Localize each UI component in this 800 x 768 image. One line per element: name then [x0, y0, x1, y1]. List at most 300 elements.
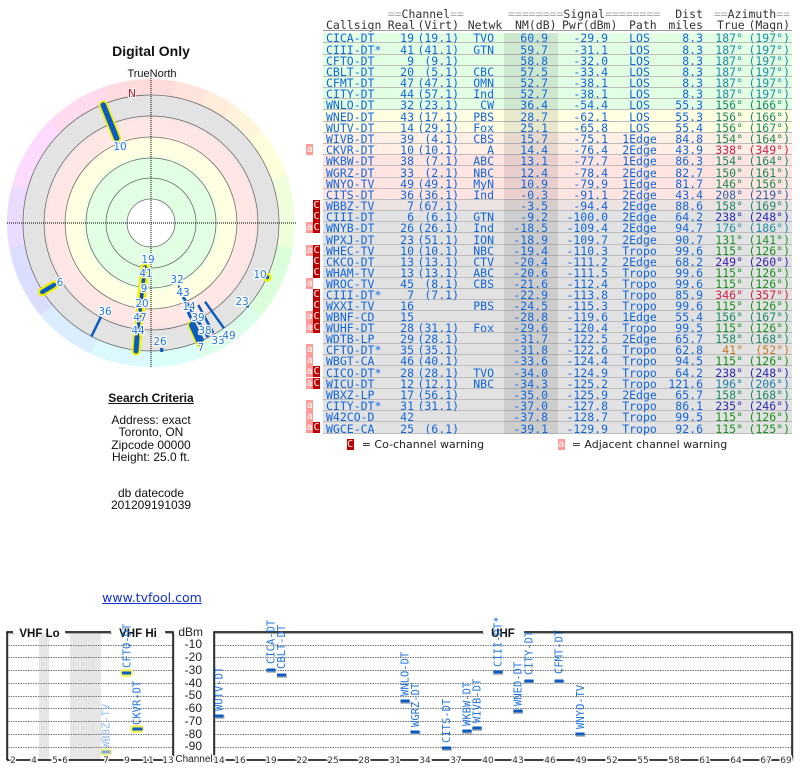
row: WGRZ-DT: NBC [473, 166, 494, 180]
dBm axis: -70 [185, 714, 202, 728]
row: WBNF-CD: (167°) [748, 310, 790, 324]
row: WNLO-DT: (23.1) [417, 98, 459, 112]
row: WUHF-DT: 99.5 [675, 321, 703, 335]
row: WHEC-TV: 99.6 [675, 244, 703, 258]
row: CIII-DT: 6 [407, 210, 414, 224]
row: WNLO-DT: CW [480, 98, 494, 112]
station labels: WBBZ-TV [100, 703, 112, 748]
channel ticks: 55 [637, 756, 649, 766]
table header: NM(dB) [515, 18, 557, 32]
polar plot background: azimuth hue ring [7, 79, 295, 367]
row: CKCO-DT: (260°) [748, 255, 790, 269]
panel: station table: a [306, 144, 313, 155]
row: CFTO-DT*: CFTO-DT* [326, 343, 381, 357]
station channel labels: 39 [191, 312, 205, 324]
row: CIII-DT*: 85.9 [675, 288, 703, 302]
row: CICO-DT*: TVO [473, 366, 494, 380]
north marker: N [128, 87, 136, 100]
row: WNYO-TV: -79.9 [573, 177, 608, 191]
table header: Real [388, 18, 415, 32]
row: CKCO-DT: 249° [715, 255, 743, 269]
channel ticks: 64 [730, 756, 742, 766]
row: WROC-TV [323, 278, 792, 289]
row: CFTO-DT: (9.1) [424, 54, 459, 68]
row: WBBZ-TV [323, 200, 792, 211]
heading: Search Criteria: Search Criteria [108, 391, 194, 405]
row: WICU-DT: 12 [400, 377, 414, 391]
panel: station table: a [306, 278, 313, 289]
row: WHEC-TV: Tropo [622, 244, 657, 258]
row: WNYB-DT: -109.4 [566, 221, 608, 235]
row: CBLT-DT: CBC [473, 65, 494, 79]
row: CICO-DT*: 28 [400, 366, 414, 380]
row: WXXI-TV: Tropo [622, 299, 657, 313]
row: WBGT-CA: 115° [715, 354, 743, 368]
row: WPXJ-DT: 90.7 [675, 233, 703, 247]
table header: ========Signal======== [508, 7, 660, 21]
row: WNED-DT: (166°) [748, 110, 790, 124]
channel ticks: 61 [699, 756, 711, 766]
row: WHAM-TV: (126°) [748, 266, 790, 280]
row: WHAM-TV: -20.6 [513, 266, 548, 280]
row: CKCO-DT: -20.4 [513, 255, 548, 269]
channel ticks: 69 [780, 756, 792, 766]
row: CIII-DT: 64.2 [675, 210, 703, 224]
row: WBXZ-LP: 17 [400, 388, 414, 402]
row: WXXI-TV: -24.5 [513, 299, 548, 313]
row: CIII-DT: (248°) [748, 210, 790, 224]
row: WPXJ-DT: -109.7 [566, 233, 608, 247]
row: WNED-DT: (17.1) [417, 110, 459, 124]
channel ticks: 9 [124, 756, 130, 766]
row: W42CO-D: Tropo [622, 410, 657, 424]
row: WGRZ-DT: (2.1) [424, 166, 459, 180]
panel: station table: C [313, 222, 320, 233]
row: CICO-DT*: Tropo [622, 366, 657, 380]
station labels: CIII-DT* [492, 616, 504, 667]
channel ticks: 46 [544, 756, 556, 766]
panel: station table: C [313, 322, 320, 333]
row: W42CO-D: -128.7 [566, 410, 608, 424]
row: CBLT-DT: (5.1) [424, 65, 459, 79]
row: CFTO-DT: (197°) [748, 54, 790, 68]
row: CFTO-DT*: -31.8 [513, 343, 548, 357]
station labels: WNLO-DT [400, 651, 412, 696]
station channel labels: 23 [235, 296, 249, 308]
row: WIVB-DT: -75.1 [573, 132, 608, 146]
channel ticks: 22 [296, 756, 308, 766]
row: WROC-TV: Tropo [622, 277, 657, 291]
row: CKVR-DT: (349°) [748, 143, 790, 157]
row: CIII-DT*: 8.3 [682, 43, 703, 57]
row: CKCO-DT: 2Edge [622, 255, 657, 269]
row: WUTV-DT: WUTV-DT [326, 121, 374, 135]
row: WICU-DT: Tropo [622, 377, 657, 391]
channel ticks: 5 [52, 756, 58, 766]
row: WICU-DT: 196° [715, 377, 743, 391]
dBm axis: -80 [185, 727, 202, 741]
row: WHEC-TV: -19.4 [513, 244, 548, 258]
row: CFMT-DT: 52.7 [520, 76, 548, 90]
row: WROC-TV: (8.1) [424, 277, 459, 291]
channel ticks: 67 [760, 756, 772, 766]
panel: station table: a [306, 400, 313, 411]
row: WDTB-LP [323, 333, 792, 344]
row: CFTO-DT* [323, 344, 792, 355]
row: WUTV-DT: 156° [715, 121, 743, 135]
row: WICU-DT: (206°) [748, 377, 790, 391]
table header: ==Channel== [388, 7, 464, 21]
row: WBBZ-TV: -3.5 [520, 199, 548, 213]
row: WGCE-CA: 25 [400, 422, 414, 436]
station channel labels: 32 [170, 274, 184, 286]
row: WUTV-DT: (29.1) [417, 121, 459, 135]
row: WIVB-DT: 15.7 [520, 132, 548, 146]
row: WNED-DT: 43 [400, 110, 414, 124]
row: WBXZ-LP: 65.7 [675, 388, 703, 402]
row: WNED-DT: PBS [473, 110, 494, 124]
row: CKVR-DT: 2Edge [622, 143, 657, 157]
row: CITY-DT*: -127.8 [566, 399, 608, 413]
row: WROC-TV: CBS [473, 277, 494, 291]
row: CIII-DT*: (7.1) [424, 288, 459, 302]
row: WNYB-DT: (186°) [748, 221, 790, 235]
row: WNLO-DT: WNLO-DT [326, 98, 374, 112]
row: WUHF-DT: (126°) [748, 321, 790, 335]
row: WUTV-DT: 14 [400, 121, 414, 135]
row: WUTV-DT: (167°) [748, 121, 790, 135]
row: WBGT-CA: (126°) [748, 354, 790, 368]
row: WIVB-DT: 154° [715, 132, 743, 146]
row: CITS-DT: CITS-DT [326, 188, 374, 202]
row: WUHF-DT: -120.4 [566, 321, 608, 335]
table header: (Virt) [417, 18, 459, 32]
row: CITY-DT*: (31.1) [417, 399, 459, 413]
row: WBXZ-LP: (168°) [748, 388, 790, 402]
row: WGCE-CA: -129.9 [566, 422, 608, 436]
row: WBNF-CD: -28.8 [513, 310, 548, 324]
row: W42CO-D: 42 [400, 410, 414, 424]
table header [323, 7, 792, 32]
station labels: CITY-DT [524, 630, 536, 675]
grid lines [8, 646, 791, 748]
row: CIII-DT*: GTN [473, 43, 494, 57]
row: WGCE-CA: (6.1) [424, 422, 459, 436]
row: CKVR-DT: A [487, 143, 494, 157]
row: CIII-DT: CIII-DT [326, 210, 374, 224]
row: WNED-DT: WNED-DT [326, 110, 374, 124]
row: WKBW-DT: ABC [473, 154, 494, 168]
channel ticks: 6 [62, 756, 68, 766]
station channel labels: 44 [131, 325, 145, 337]
legend: warning symbols: a [558, 439, 564, 450]
legend: warning symbols: = Co-channel warning [362, 438, 484, 451]
row: WUHF-DT: (31.1) [417, 321, 459, 335]
station channel labels: 20 [135, 298, 149, 310]
row: CFMT-DT: 8.3 [682, 76, 703, 90]
station labels: CICA-DT [266, 619, 278, 664]
row: CFTO-DT*: (35.1) [417, 343, 459, 357]
row: CIII-DT*: (41.1) [417, 43, 459, 57]
station labels: CBLT-DT [276, 624, 288, 669]
table header: Callsign [326, 18, 381, 32]
dBm axis: -40 [185, 676, 202, 690]
row: CICA-DT: (19.1) [417, 31, 459, 45]
channel ticks: 13 [162, 756, 174, 766]
row: WBNF-CD: -119.6 [566, 310, 608, 324]
dBm axis: -90 [185, 739, 202, 753]
row: CITY-DT: 44 [400, 87, 414, 101]
row: CFMT-DT: 47 [400, 76, 414, 90]
station channel labels: 36 [98, 306, 112, 318]
channel ticks: 28 [358, 756, 370, 766]
row: CKCO-DT: 68.2 [675, 255, 703, 269]
station channel labels: 41 [139, 268, 153, 280]
row: CITY-DT: -38.1 [573, 87, 608, 101]
channel ticks: 40 [482, 756, 494, 766]
row: WBBZ-TV: 7 [407, 199, 414, 213]
text block: search parameters: Address: exact Toronto, ON Zipcode 00000 Height: 25.0 ft. [111, 413, 191, 464]
row: WICU-DT: NBC [473, 377, 494, 391]
row: CIII-DT*: 7 [407, 288, 414, 302]
row: WBXZ-LP: 158° [715, 388, 743, 402]
table header: Path [629, 18, 657, 32]
row: CFTO-DT: 9 [407, 54, 414, 68]
row: CIII-DT*: CIII-DT* [326, 288, 381, 302]
panel: station table: a [306, 311, 313, 322]
row: WIVB-DT [323, 133, 792, 144]
channel ticks [10, 756, 792, 766]
panel: station table: C [313, 311, 320, 322]
row: WUHF-DT: -29.6 [513, 321, 548, 335]
row: CIII-DT*: LOS [629, 43, 650, 57]
row: CITY-DT: 187° [715, 87, 743, 101]
station channel labels: 49 [222, 330, 236, 342]
row: CBLT-DT: CBLT-DT [326, 65, 374, 79]
row: WNED-DT: 156° [715, 110, 743, 124]
row: CBLT-DT: -33.4 [573, 65, 608, 79]
row: CITS-DT: 43.4 [675, 188, 703, 202]
row: WPXJ-DT: 2Edge [622, 233, 657, 247]
table header: Dist [675, 7, 703, 21]
row: CFTO-DT*: 62.8 [675, 343, 703, 357]
table header: miles [668, 18, 703, 32]
yellow station halos [100, 669, 144, 756]
row: CITS-DT: 208° [715, 188, 743, 202]
panel: station table: a [306, 222, 313, 233]
title: Digital Only: Digital Only [112, 43, 190, 59]
channel ticks: 14 [213, 756, 225, 766]
row: CKVR-DT [323, 144, 792, 155]
panel: station table: C [313, 211, 320, 222]
row: WNLO-DT: 32 [400, 98, 414, 112]
row: WHAM-TV: 99.6 [675, 266, 703, 280]
row: WHAM-TV [323, 267, 792, 278]
row: CFTO-DT: 58.8 [520, 54, 548, 68]
row: WGCE-CA: 115° [715, 422, 743, 436]
row: CITY-DT*: -37.0 [513, 399, 548, 413]
row: WNLO-DT: 55.3 [675, 98, 703, 112]
row: WICU-DT: -125.2 [566, 377, 608, 391]
row: CICO-DT*: 64.2 [675, 366, 703, 380]
row: WBGT-CA: 46 [400, 354, 414, 368]
row: WBBZ-TV: 2Edge [622, 199, 657, 213]
station labels: WNYO-TV [575, 684, 587, 729]
row: CIII-DT* [323, 289, 792, 300]
row: WHEC-TV: (126°) [748, 244, 790, 258]
row: CFTO-DT: 187° [715, 54, 743, 68]
row: CITY-DT*: CITY-DT* [326, 399, 381, 413]
dBm axis: -20 [185, 650, 202, 664]
row: WNED-DT: 28.7 [520, 110, 548, 124]
row: WPXJ-DT: -18.9 [513, 233, 548, 247]
row: CFMT-DT [323, 77, 792, 88]
row: WKBW-DT: 154° [715, 154, 743, 168]
row: WBBZ-TV: -94.4 [573, 199, 608, 213]
channel ticks: 52 [606, 756, 618, 766]
row: WBGT-CA: -124.4 [566, 354, 608, 368]
row: CKCO-DT [323, 256, 792, 267]
row: WGRZ-DT [323, 166, 792, 178]
row: CBLT-DT: 187° [715, 65, 743, 79]
row: WXXI-TV: PBS [473, 299, 494, 313]
channel ticks: 7 [103, 756, 109, 766]
row: WGCE-CA: Tropo [622, 422, 657, 436]
row: WHAM-TV: 13 [400, 266, 414, 280]
station channel labels: 26 [153, 336, 167, 348]
table header: Netwk [468, 18, 502, 32]
panel: station table: C [313, 378, 320, 389]
row: WHAM-TV: ABC [473, 266, 494, 280]
row: WIVB-DT: 39 [400, 132, 414, 146]
row: WICU-DT: (12.1) [417, 377, 459, 391]
row: CITY-DT: LOS [629, 87, 650, 101]
row: WNYO-TV: WNYO-TV [326, 177, 374, 191]
channel ticks: 11 [142, 756, 154, 766]
row: WGRZ-DT: 150° [715, 166, 743, 180]
row: WNYO-TV: (156°) [748, 177, 790, 191]
polar plot: rings, crosshair and stations [7, 78, 296, 367]
row: WBGT-CA: WBGT-CA [326, 354, 374, 368]
row: WGCE-CA [323, 422, 792, 434]
table header: Pwr(dBm) [562, 18, 617, 32]
row: CITY-DT* [323, 400, 792, 411]
band headings: VHF Hi [119, 628, 157, 640]
row: WDTB-LP: 65.7 [675, 332, 703, 346]
row: CIII-DT*: (357°) [748, 288, 790, 302]
dBm axis [175, 625, 213, 765]
row: WUTV-DT: 55.4 [675, 121, 703, 135]
panel: station table: C [313, 300, 320, 311]
row: WBNF-CD: WBNF-CD [326, 310, 374, 324]
row: WHEC-TV: NBC [473, 244, 494, 258]
row: CKCO-DT: 13 [400, 255, 414, 269]
row: WBBZ-TV: WBBZ-TV [326, 199, 374, 213]
row: WHEC-TV [323, 245, 792, 256]
row: WNYB-DT: -18.5 [513, 221, 548, 235]
row: WIVB-DT: 1Edge [622, 132, 657, 146]
row: WPXJ-DT: (141°) [748, 233, 790, 247]
row: CFTO-DT: 8.3 [682, 54, 703, 68]
row: WIVB-DT: 84.8 [675, 132, 703, 146]
row: CICA-DT: TVO [473, 31, 494, 45]
row: WNYB-DT [323, 222, 792, 233]
legend: warning symbols: = Adjacent channel warning [572, 438, 727, 451]
row: WKBW-DT: (164°) [748, 154, 790, 168]
row: CFMT-DT: -38.1 [573, 76, 608, 90]
station labels: WGRZ-DT [410, 682, 422, 727]
legend: warning symbols: C [347, 439, 353, 450]
row: CKCO-DT: (13.1) [417, 255, 459, 269]
dBm axis: -60 [185, 701, 202, 715]
row: WDTB-LP: 158° [715, 332, 743, 346]
channel ticks: 4 [31, 756, 37, 766]
row: CITY-DT*: Tropo [622, 399, 657, 413]
row: WNLO-DT: (166°) [748, 98, 790, 112]
row: WUTV-DT [323, 122, 792, 133]
row: WBXZ-LP: 2Edge [622, 388, 657, 402]
row: CKCO-DT: CKCO-DT [326, 255, 374, 269]
row: WPXJ-DT [323, 233, 792, 245]
panel: station table: C [313, 366, 320, 377]
panel: station table: a [306, 344, 313, 355]
row: WHEC-TV: 10 [400, 244, 414, 258]
row: CITY-DT: (197°) [748, 87, 790, 101]
row: WXXI-TV: -115.3 [566, 299, 608, 313]
row: WHEC-TV: 115° [715, 244, 743, 258]
row: WBNF-CD: 15 [400, 310, 414, 324]
row: CIII-DT*: Tropo [622, 288, 657, 302]
row: WNYB-DT: (26.1) [417, 221, 459, 235]
row: WBBZ-TV: (169°) [748, 199, 790, 213]
row: WXXI-TV: WXXI-TV [326, 299, 374, 313]
station channel labels: 33 [211, 335, 225, 347]
row: CIII-DT* [323, 43, 792, 55]
row: WXXI-TV: 115° [715, 299, 743, 313]
row: CICA-DT: CICA-DT [326, 31, 374, 45]
row: CICA-DT: LOS [629, 31, 650, 45]
row: CBLT-DT: 8.3 [682, 65, 703, 79]
row: CIII-DT: 2Edge [622, 210, 657, 224]
dBm axis: -50 [185, 688, 202, 702]
row: WICU-DT: WICU-DT [326, 377, 374, 391]
row: WBGT-CA: (40.1) [417, 354, 459, 368]
row: WGRZ-DT: -78.4 [573, 166, 608, 180]
row: WGCE-CA: 92.6 [675, 422, 703, 436]
row: CICA-DT: 19 [400, 31, 414, 45]
polar plot background: signal strength bands [23, 95, 279, 351]
row: CFTO-DT*: 41° [722, 343, 743, 357]
channel ticks: 16 [234, 756, 246, 766]
band headings: VHF Lo [19, 628, 60, 640]
row: WBGT-CA: 94.5 [675, 354, 703, 368]
row: CIII-DT: (6.1) [424, 210, 459, 224]
dBm axis: -30 [185, 663, 202, 677]
row: WBXZ-LP: -125.9 [566, 388, 608, 402]
row: WNYO-TV: (49.1) [417, 177, 459, 191]
row: CKVR-DT: 338° [715, 143, 743, 157]
row: CKCO-DT: -111.2 [566, 255, 608, 269]
row: WBNF-CD: 55.4 [675, 310, 703, 324]
row: WROC-TV: 45 [400, 277, 414, 291]
row: WBNF-CD: 156° [715, 310, 743, 324]
row: WGRZ-DT: (161°) [748, 166, 790, 180]
link text: www.tvfool.com: www.tvfool.com [102, 590, 202, 605]
station labels: CITS-DT [441, 698, 453, 743]
row: WUHF-DT: 28 [400, 321, 414, 335]
row: WBXZ-LP [323, 389, 792, 400]
row: CIII-DT: 238° [715, 210, 743, 224]
